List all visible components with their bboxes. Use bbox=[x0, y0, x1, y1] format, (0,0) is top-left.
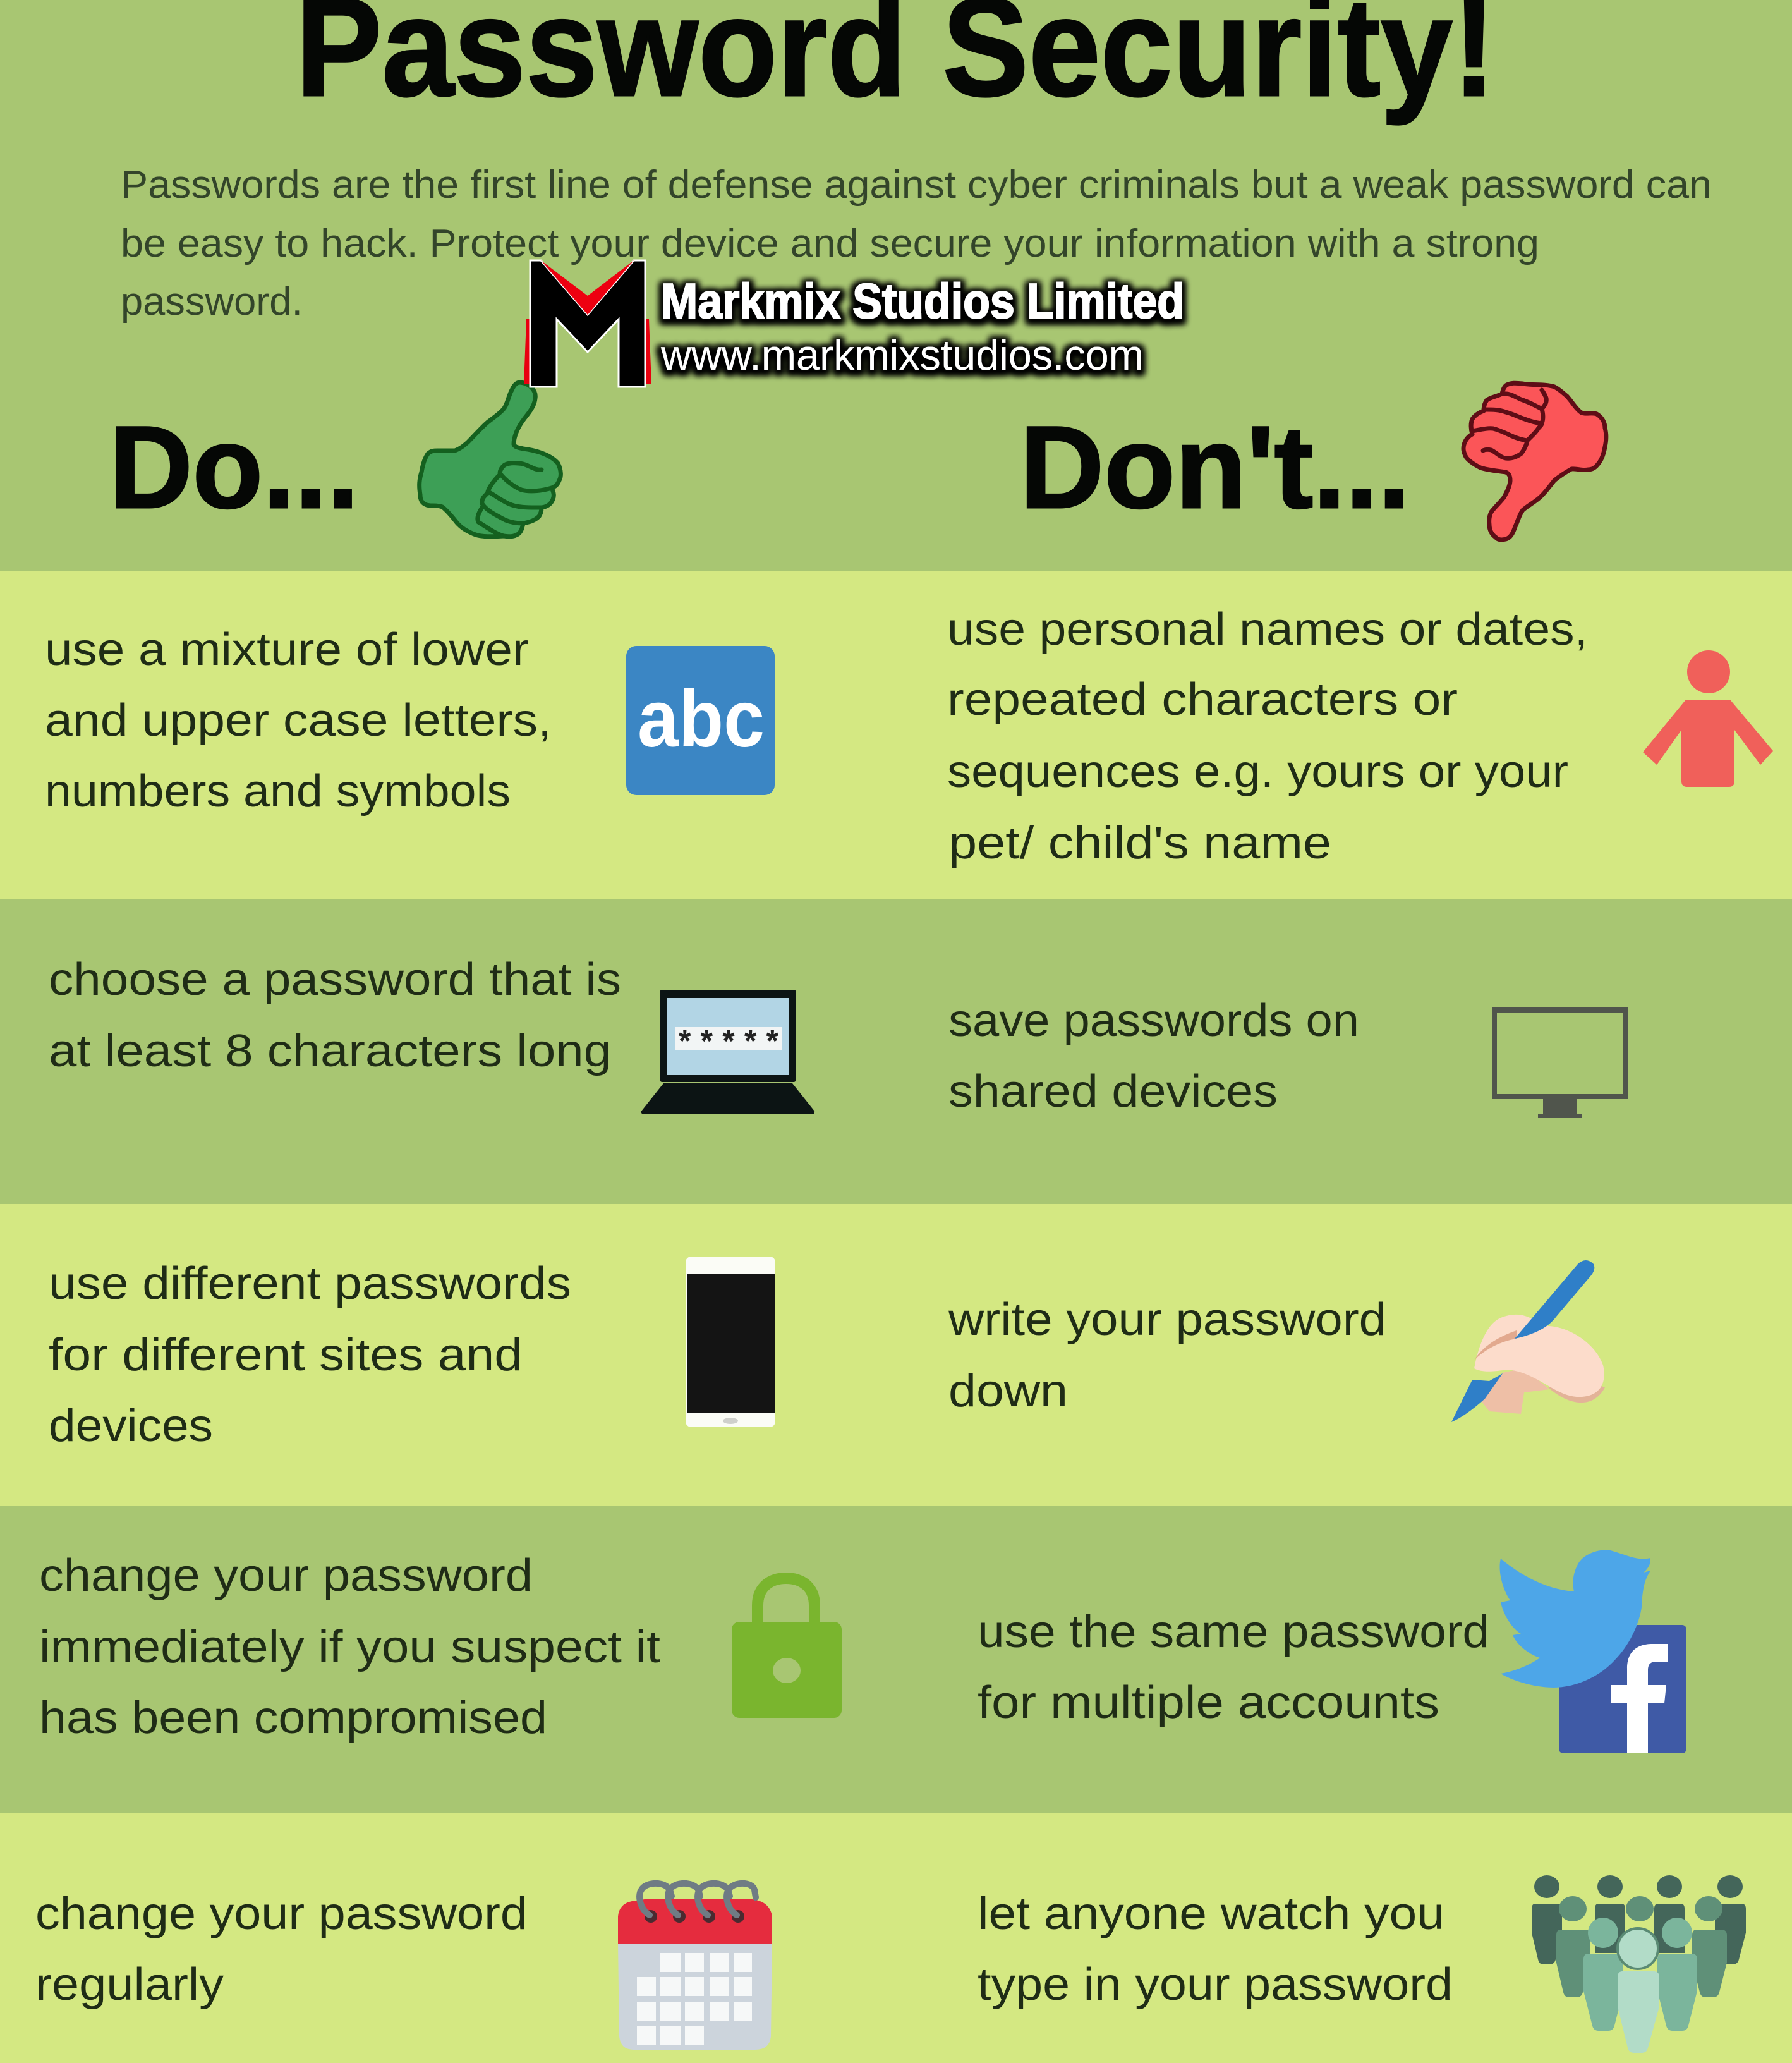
do text: compromised bbox=[39, 1550, 660, 1743]
facebook logo bbox=[1559, 1625, 1686, 1753]
icon: facebook and twitter bbox=[1499, 1550, 1686, 1753]
icon: calendar bbox=[618, 1883, 772, 2050]
icon: crowd bbox=[1532, 1875, 1746, 2053]
icon: abc bbox=[626, 646, 775, 795]
icon: lock bbox=[732, 1578, 842, 1718]
twitter bird bbox=[1499, 1550, 1650, 1688]
do text: different passwords: for different sites and bbox=[49, 1330, 523, 1380]
dont text: same password bbox=[978, 1607, 1489, 1728]
dont heading: Don't... bbox=[1020, 403, 1410, 533]
do text: compromised: immediately if you suspect it bbox=[39, 1622, 660, 1672]
do text: mixture: numbers and symbols bbox=[45, 766, 511, 817]
dont text: same password: for multiple accounts bbox=[978, 1677, 1439, 1728]
do text: length: at least 8 characters long bbox=[49, 1026, 612, 1076]
dont text: personal names: sequences e.g. yours or your bbox=[947, 746, 1568, 797]
do text: different passwords bbox=[49, 1258, 571, 1451]
do text: mixture: use a mixture of lower bbox=[45, 624, 529, 675]
dont text: write down bbox=[948, 1294, 1386, 1416]
dont text: shared devices bbox=[948, 995, 1359, 1117]
dont text: watching bbox=[978, 1889, 1453, 2010]
dont text: personal names bbox=[947, 604, 1588, 868]
dont text: write down: write your password bbox=[948, 1294, 1386, 1345]
intro paragraph: be easy to hack. Protect your device and secure your information with a strong bbox=[121, 222, 1539, 265]
icon: laptop bbox=[641, 990, 814, 1114]
do text: regularly bbox=[35, 1889, 528, 2010]
do text: mixture: and upper case letters, bbox=[45, 695, 552, 746]
watermark url: www.markmixstudios.com bbox=[660, 331, 1144, 379]
dont text: shared devices: save passwords on bbox=[948, 995, 1359, 1046]
dont text: personal names: repeated characters or bbox=[947, 674, 1458, 725]
dont text: watching: type in your password bbox=[978, 1959, 1453, 2010]
row 2 bbox=[0, 899, 1792, 1204]
dont text: write down: down bbox=[948, 1366, 1068, 1416]
row 1 bbox=[0, 571, 1792, 899]
icon: thumbs down bbox=[1463, 383, 1606, 540]
icon: monitor bbox=[1494, 1010, 1626, 1118]
do text: length bbox=[49, 954, 621, 1076]
header panel bbox=[0, 0, 1792, 571]
icon: thumbs up bbox=[420, 382, 560, 537]
dont text: shared devices: shared devices bbox=[948, 1066, 1278, 1117]
do text: regularly: change your password bbox=[35, 1889, 528, 1939]
row 4 bbox=[0, 1506, 1792, 1813]
row 5 bbox=[0, 1813, 1792, 2063]
row 3 bbox=[0, 1204, 1792, 1506]
dont text: watching: let anyone watch you bbox=[978, 1889, 1444, 1939]
do text: compromised: change your password bbox=[39, 1550, 533, 1601]
do text: compromised: has been compromised bbox=[39, 1693, 547, 1743]
do text: different passwords: use different passwords bbox=[49, 1258, 571, 1309]
icon: laptop: ***** bbox=[679, 1023, 779, 1059]
intro paragraph: Passwords are the first line of defense against cyber criminals but a weak password can bbox=[121, 163, 1712, 207]
intro paragraph: password. bbox=[121, 280, 303, 324]
watermark name: Markmix Studios Limited bbox=[661, 273, 1184, 329]
do heading: Do... bbox=[109, 403, 359, 533]
dont text: personal names: use personal names or dates, bbox=[947, 604, 1588, 655]
logo mark bbox=[524, 260, 651, 387]
icon: person bbox=[1643, 650, 1773, 787]
icon: phone bbox=[686, 1257, 775, 1427]
intro paragraph bbox=[121, 163, 1712, 324]
do text: mixture bbox=[45, 624, 552, 817]
do text: regularly: regularly bbox=[35, 1959, 224, 2010]
watermark logo bbox=[524, 260, 1184, 387]
dont text: same password: use the same password bbox=[978, 1607, 1489, 1657]
do text: different passwords: devices bbox=[49, 1401, 213, 1451]
icon: abc: abc bbox=[638, 674, 765, 764]
do text: length: choose a password that is bbox=[49, 954, 621, 1005]
dont text: personal names: pet/ child's name bbox=[948, 818, 1331, 868]
icon: hand with pen bbox=[1451, 1260, 1605, 1422]
